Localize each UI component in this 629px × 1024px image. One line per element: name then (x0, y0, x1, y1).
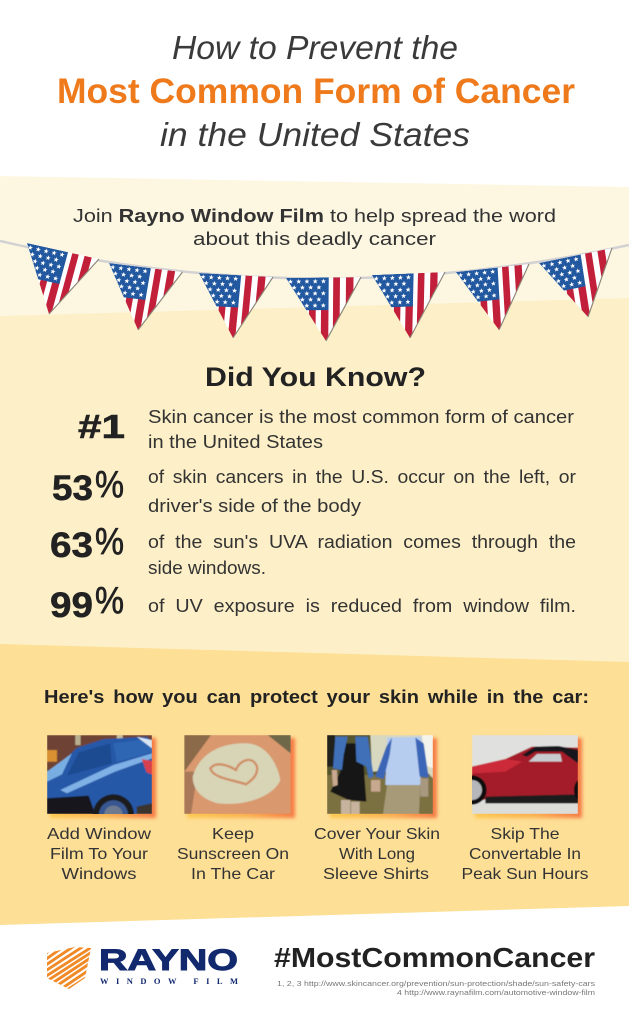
stat: 63%: % (95, 521, 124, 563)
sources: 1, 2, 3 http://www.skincancer.org/prevention/sun-protection/shade/sun-safety-cars (277, 979, 595, 988)
photo shadow (330, 738, 437, 818)
photo shadow (50, 738, 156, 818)
stat: 53% (52, 464, 576, 516)
caption: Peak Sun Hours (462, 866, 588, 883)
sources (277, 979, 595, 997)
intro text (73, 205, 556, 249)
photo: red convertible (472, 735, 578, 814)
flag 5 (371, 272, 445, 340)
caption: Add Window (47, 826, 152, 843)
title: How to Prevent the (172, 29, 458, 66)
tip 3: long sleeves (314, 735, 440, 883)
flag 4 (285, 277, 361, 342)
stat: 99%: of UV exposure is reduced from window film. (148, 596, 576, 616)
caption: Keep (212, 826, 254, 843)
title (57, 29, 575, 153)
logo wordmark: RAYNO (99, 944, 238, 977)
photo shadow (475, 738, 582, 818)
background: pale yellow band (0, 298, 629, 670)
stat: #1: #1 (78, 408, 125, 445)
sources: 4 http://www.raynafilm.com/automotive-window-film (397, 988, 595, 997)
stat: 63%: of the sun's UVA radiation comes through the (148, 532, 576, 552)
caption: With Long (339, 846, 415, 863)
title: Most Common Form of Cancer (57, 72, 575, 111)
background: cream band (0, 176, 629, 330)
caption (47, 826, 152, 883)
stat: #1: Skin cancer is the most common form of cancer (148, 407, 574, 427)
bunting flags (10, 243, 622, 342)
stat: #1: in the United States (148, 432, 323, 452)
caption: Sleeve Shirts (323, 866, 429, 883)
tip 4: convertible (457, 735, 588, 883)
heading: did you know: Did You Know? (205, 362, 426, 392)
hashtag: #MostCommonCancer (274, 942, 595, 973)
caption (314, 826, 440, 883)
stat: 53%: 53 (52, 469, 93, 508)
tip 1: window film (47, 735, 156, 883)
tip 2: sunscreen (177, 735, 295, 883)
stat: 63% (50, 521, 576, 578)
flag 1 (10, 243, 99, 321)
stat: 53%: % (95, 464, 124, 506)
stat: 99%: % (95, 580, 124, 622)
caption: Convertable In (469, 846, 581, 863)
background: golden band (0, 644, 629, 925)
caption: Film To Your (50, 846, 149, 863)
flag 6 (456, 264, 533, 334)
stat: 99% (50, 580, 576, 625)
title: in the United States (160, 116, 470, 153)
logo icon: striped shield (47, 947, 91, 989)
caption: Windows (62, 866, 136, 883)
flag 7 (539, 248, 622, 325)
stat: 63%: 63 (50, 526, 93, 565)
stat: #1 (78, 407, 574, 452)
intro text: Join Rayno Window Film to help spread the word (73, 205, 556, 226)
caption: Sunscreen On (177, 846, 289, 863)
caption: In The Car (191, 866, 276, 883)
caption (462, 826, 588, 883)
stat: 53%: driver's side of the body (148, 496, 361, 516)
flag 3 (193, 273, 273, 340)
stat: 99%: 99 (50, 586, 93, 625)
caption: Skip The (490, 826, 560, 843)
caption (177, 826, 289, 883)
heading: protect your skin: Here's how you can protect your skin while in the car: (44, 687, 589, 707)
logo subtitle: WINDOW FILM (100, 976, 238, 986)
stat: 53%: of skin cancers in the U.S. occur on the left, or (148, 467, 576, 487)
bunting string (0, 241, 629, 279)
caption: Cover Your Skin (314, 826, 440, 843)
logo: Rayno Window Film (47, 947, 238, 989)
photo shadow (187, 738, 295, 818)
stat: 63%: side windows. (148, 558, 266, 578)
photo: blue car (47, 735, 152, 814)
intro text: about this deadly cancer (193, 228, 436, 249)
photo: sunscreen heart (184, 735, 291, 814)
photo: couple in long sleeves (327, 735, 433, 814)
flag 2 (98, 263, 182, 334)
